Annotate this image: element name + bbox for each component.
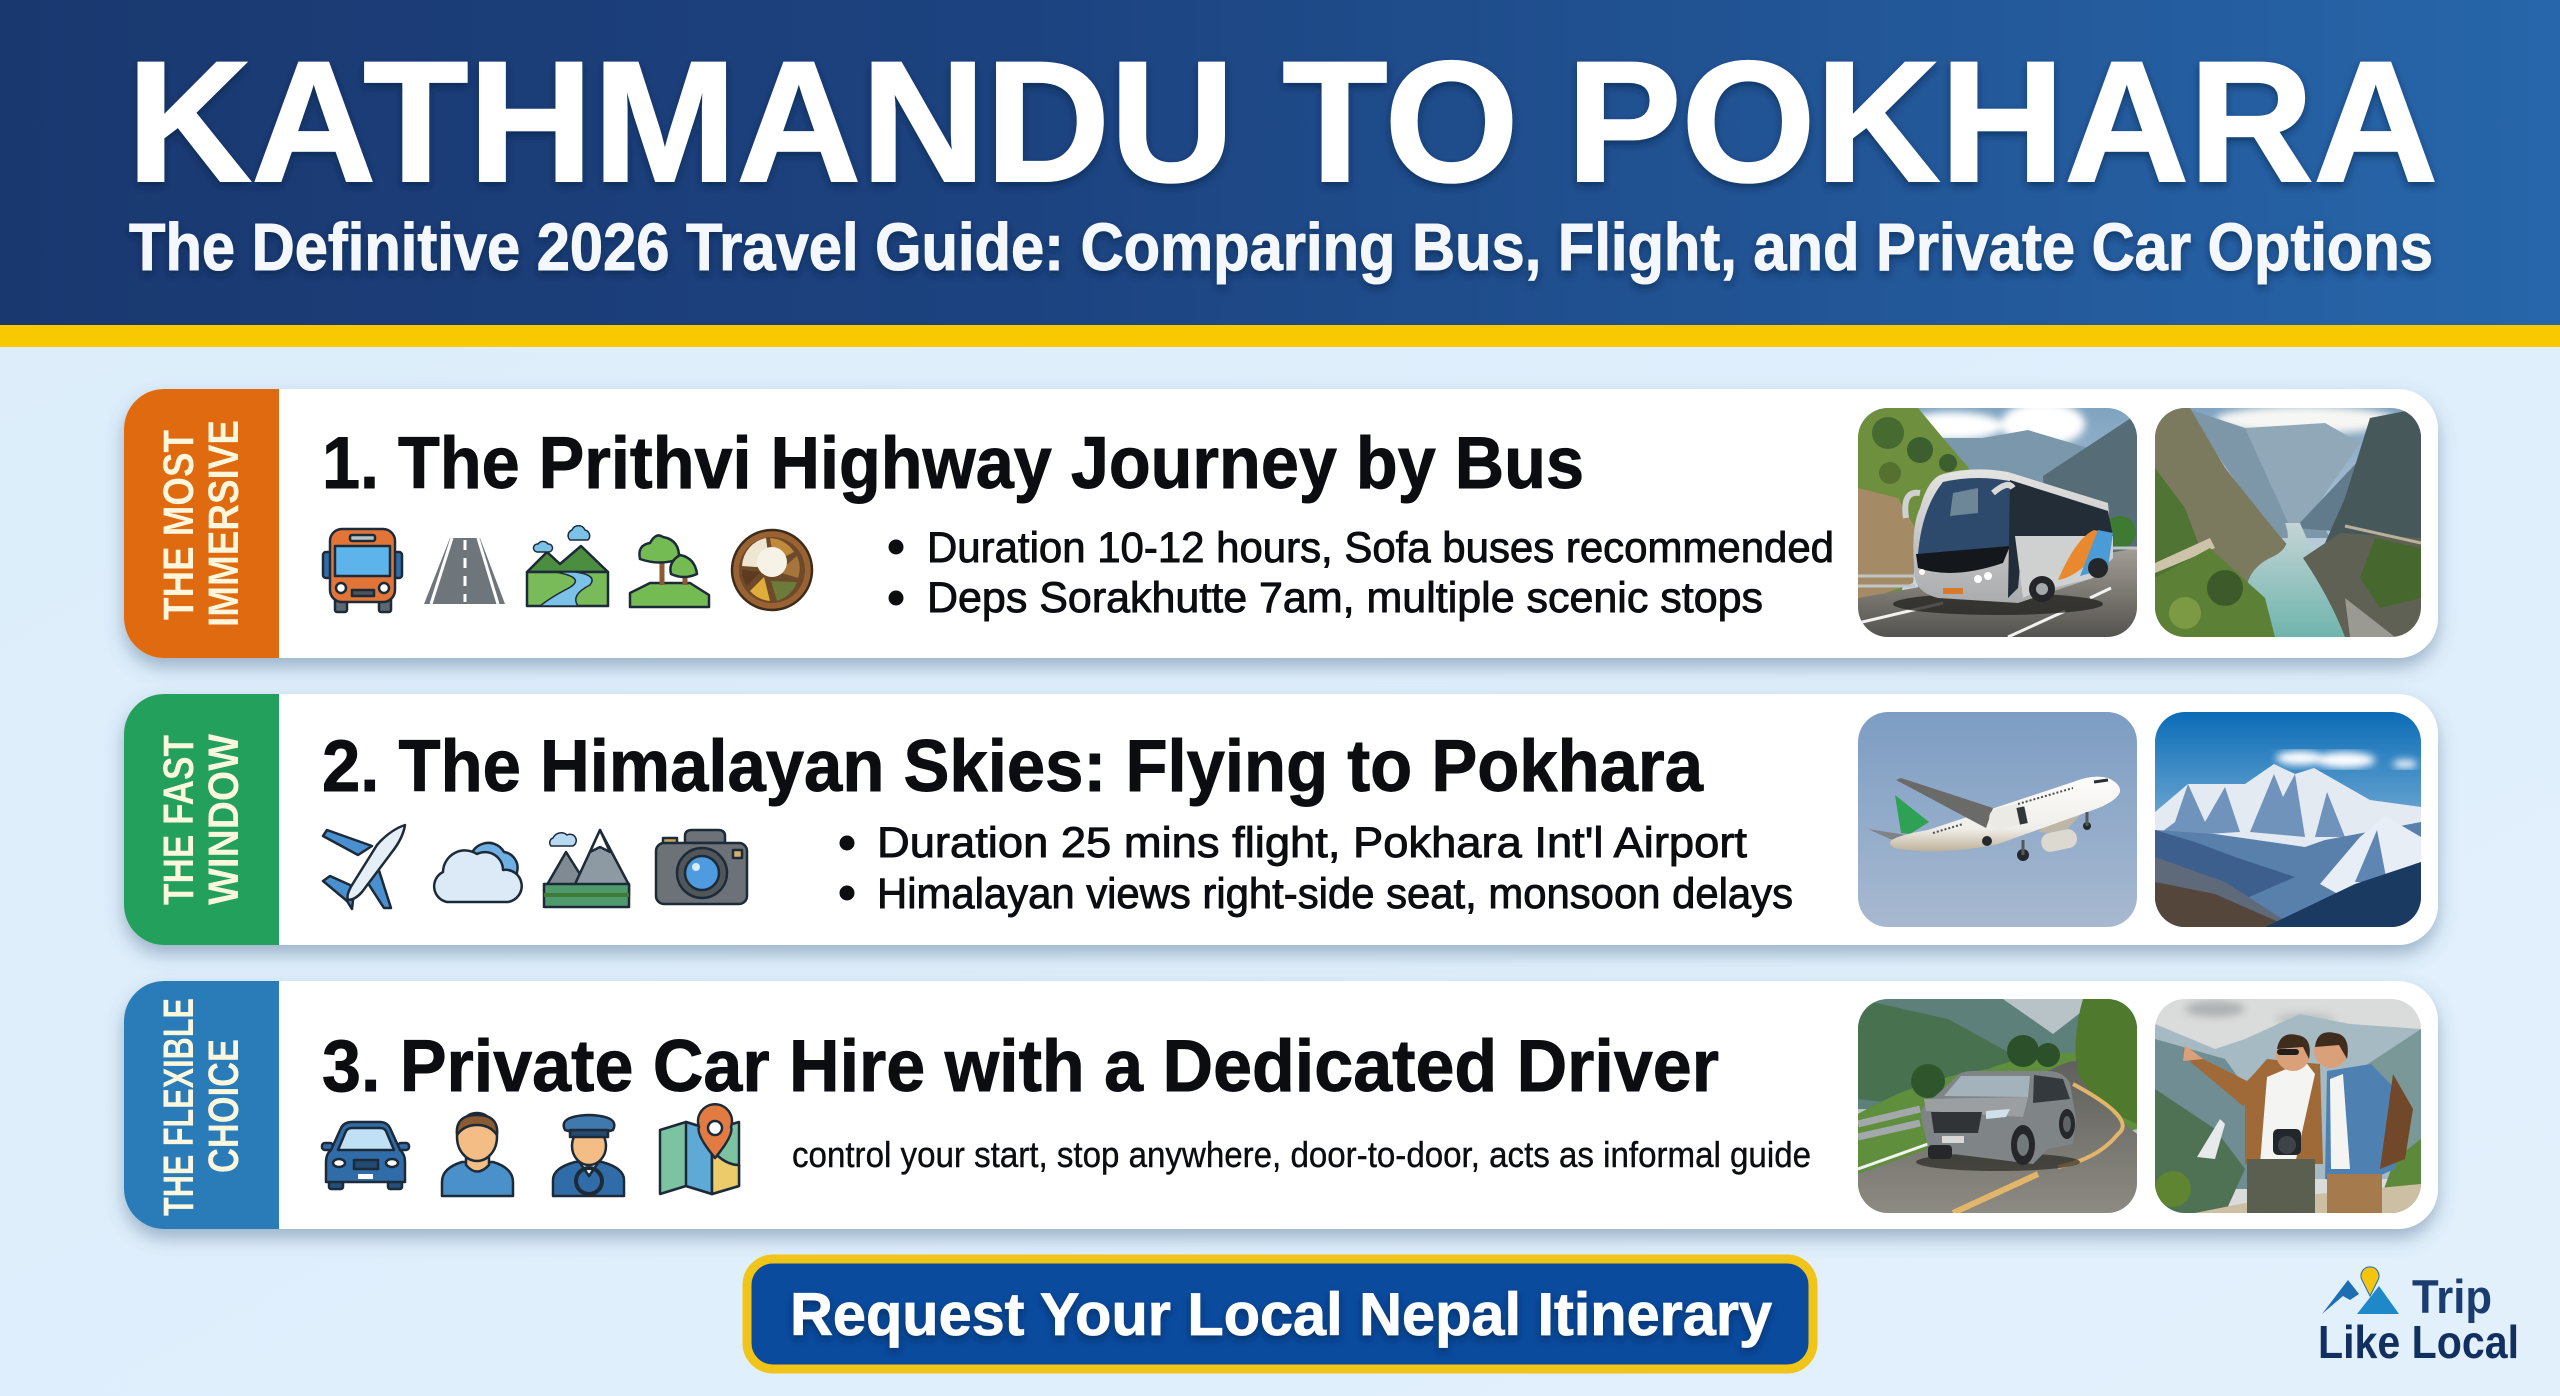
tab: the fast window	[124, 694, 279, 945]
icon: clouds	[434, 843, 522, 902]
icon: valley with river	[527, 526, 608, 606]
photo: river gorge	[2155, 406, 2421, 637]
tab: the fast window: WINDOW	[200, 734, 248, 905]
photo: airplane in flight	[1858, 712, 2137, 927]
icon: person	[442, 1113, 513, 1196]
icon: trees on hill	[630, 535, 709, 607]
icon: snowy mountains	[544, 830, 629, 907]
tab: the flexible choice: THE FLEXIBLE	[155, 998, 203, 1216]
header banner	[0, 0, 2560, 347]
icon: dal bhat plate	[732, 530, 812, 610]
bullet list: bus: Duration 10-12 hours, Sofa buses recommended	[927, 524, 1834, 572]
icon: map with pin	[660, 1104, 739, 1194]
icon: car	[322, 1122, 409, 1189]
icon: camera	[656, 830, 747, 904]
icon: bus	[323, 529, 402, 612]
bullet list: flight	[840, 819, 1793, 918]
heading: flight: 2. The Himalayan Skies: Flying to Pokhara	[322, 726, 1704, 807]
panel: bus journey	[124, 389, 2438, 658]
icon: airplane	[323, 825, 405, 909]
bullet list: bus: Deps Sorakhutte 7am, multiple scenic stops	[927, 574, 1763, 622]
panel: flight	[124, 694, 2438, 945]
tab: the most immersive: IMMERSIVE	[200, 420, 248, 627]
tab: the flexible choice	[124, 981, 279, 1229]
photo: two travellers	[2155, 999, 2421, 1213]
bullet list: flight: Duration 25 mins flight, Pokhara Int'l Airport	[877, 819, 1747, 867]
button: request itinerary	[747, 1259, 1813, 1369]
logo: Trip Like Local	[2318, 1267, 2519, 1368]
photo: bus on highway	[1858, 402, 2137, 637]
logo: Trip Like Local: Like Local	[2318, 1316, 2519, 1368]
title: KATHMANDU TO POKHARA	[127, 26, 2438, 218]
photo: snow peak	[2155, 712, 2421, 927]
text: car benefits: control your start, stop anywhere, door-to-door, acts as informal guide	[792, 1134, 1811, 1175]
bullet list: flight: Himalayan views right-side seat, monsoon delays	[877, 870, 1793, 918]
tab: the flexible choice: CHOICE	[200, 1039, 248, 1173]
panel: private car	[124, 981, 2438, 1229]
logo: Trip Like Local: Trip	[2412, 1270, 2492, 1323]
tab: the most immersive: THE MOST	[155, 430, 203, 620]
heading: car: 3. Private Car Hire with a Dedicated Driver	[322, 1026, 1719, 1107]
tab: the fast window: THE FAST	[155, 735, 203, 905]
photo: SUV on mountain road	[1858, 999, 2137, 1213]
heading: bus: 1. The Prithvi Highway Journey by Bus	[322, 423, 1584, 504]
tab: the most immersive	[124, 389, 279, 658]
icon: chauffeur	[553, 1115, 624, 1196]
button: request itinerary: Request Your Local Nepal Itinerary	[790, 1281, 1773, 1348]
icon: road	[424, 538, 505, 604]
bullet list: bus	[888, 524, 1834, 622]
